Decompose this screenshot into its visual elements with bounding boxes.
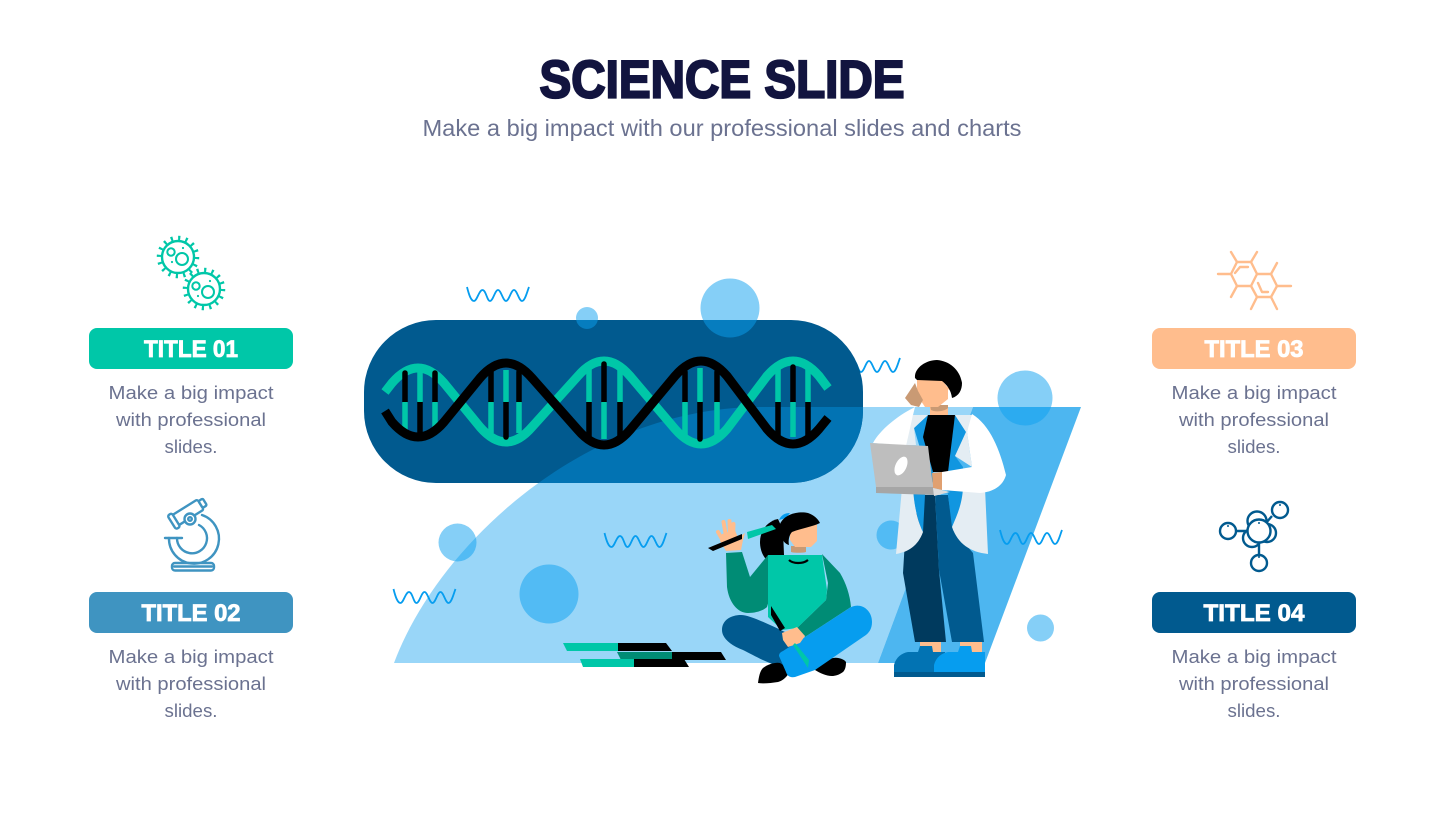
body text: title 01: with professional [115, 409, 266, 430]
raised pen [708, 534, 742, 551]
panel: title 01 [89, 238, 293, 457]
body text: title 01: slides. [164, 436, 218, 457]
hand on face [905, 383, 923, 407]
hair [780, 512, 820, 545]
figure: standing man with laptop [870, 360, 1006, 677]
raised hand [718, 521, 745, 551]
body text: title 04: slides. [1228, 700, 1280, 721]
background: blue parallelogram [878, 407, 1081, 663]
body text: title 03: Make a big impact [1172, 382, 1336, 403]
coat lining [913, 415, 934, 532]
panel: title 02 [89, 495, 293, 721]
shoes [758, 658, 846, 683]
coat lapels [905, 415, 973, 467]
squiggles [394, 287, 1062, 603]
subtitle: Make a big impact with our professional slides and charts [422, 115, 1022, 141]
collar [789, 560, 808, 563]
navy trouser leg [903, 495, 946, 642]
DNA double helix [385, 361, 828, 445]
torso [768, 555, 827, 630]
body text: title 03: slides. [1228, 436, 1280, 457]
body text: title 02: Make a big impact [108, 646, 274, 667]
body text: title 04: Make a big impact [1172, 646, 1336, 667]
face [917, 380, 948, 407]
label bar: title 01 [89, 328, 293, 369]
central illustration [364, 278, 1081, 683]
lower hand [782, 627, 805, 647]
coat lower left [896, 488, 923, 554]
icon: hexagon molecule [1218, 252, 1291, 309]
coat lower right [952, 488, 988, 554]
hair [915, 360, 962, 398]
label bar: title 03 [1152, 328, 1356, 369]
label bar: title 02 [89, 592, 293, 633]
hand on laptop [932, 472, 942, 490]
right shoe [934, 646, 985, 677]
capsule [364, 320, 863, 483]
right arm [797, 554, 851, 637]
body text: title 01: Make a big impact [108, 382, 274, 403]
panel: title 04 [1152, 502, 1356, 721]
blue trouser leg [935, 495, 984, 642]
label: title 01: TITLE 01 [144, 336, 238, 363]
lower pen top [771, 606, 785, 631]
icon: atom cluster [1220, 502, 1288, 571]
label bar: title 04 [1152, 592, 1356, 633]
neck [791, 546, 806, 553]
right sleeve [942, 414, 1006, 493]
figure: seated woman [708, 512, 872, 683]
bubbles [438, 278, 1054, 642]
laptop [870, 443, 950, 496]
left arm [726, 552, 775, 613]
body text: title 02: slides. [164, 700, 218, 721]
icon: bacteria [159, 238, 223, 308]
body text: title 02: with professional [115, 673, 266, 694]
ankles [920, 642, 982, 653]
label: title 03: TITLE 03 [1204, 336, 1304, 363]
light blue leg [779, 606, 872, 677]
panel: title 03 [1152, 252, 1356, 457]
lower pen tip [793, 643, 809, 668]
hair band [779, 513, 790, 520]
title: SCIENCE SLIDE [540, 50, 904, 110]
label: title 04: TITLE 04 [1204, 600, 1305, 627]
squiggle behind capsule [838, 358, 900, 372]
body text: title 03: with professional [1178, 409, 1329, 430]
icon: microscope [165, 495, 219, 570]
neck [930, 405, 948, 415]
black shirt [923, 415, 955, 472]
label: title 02: TITLE 02 [142, 600, 240, 627]
face [790, 522, 817, 547]
background: light blue arc shape [394, 407, 973, 663]
ponytail [760, 519, 784, 559]
left shoe [894, 646, 945, 677]
navy leg [722, 615, 806, 666]
capsule overlap with arc [538, 407, 863, 483]
body text: title 04: with professional [1178, 673, 1329, 694]
left sleeve [873, 407, 915, 446]
books on floor [563, 643, 726, 667]
ear [948, 384, 954, 390]
